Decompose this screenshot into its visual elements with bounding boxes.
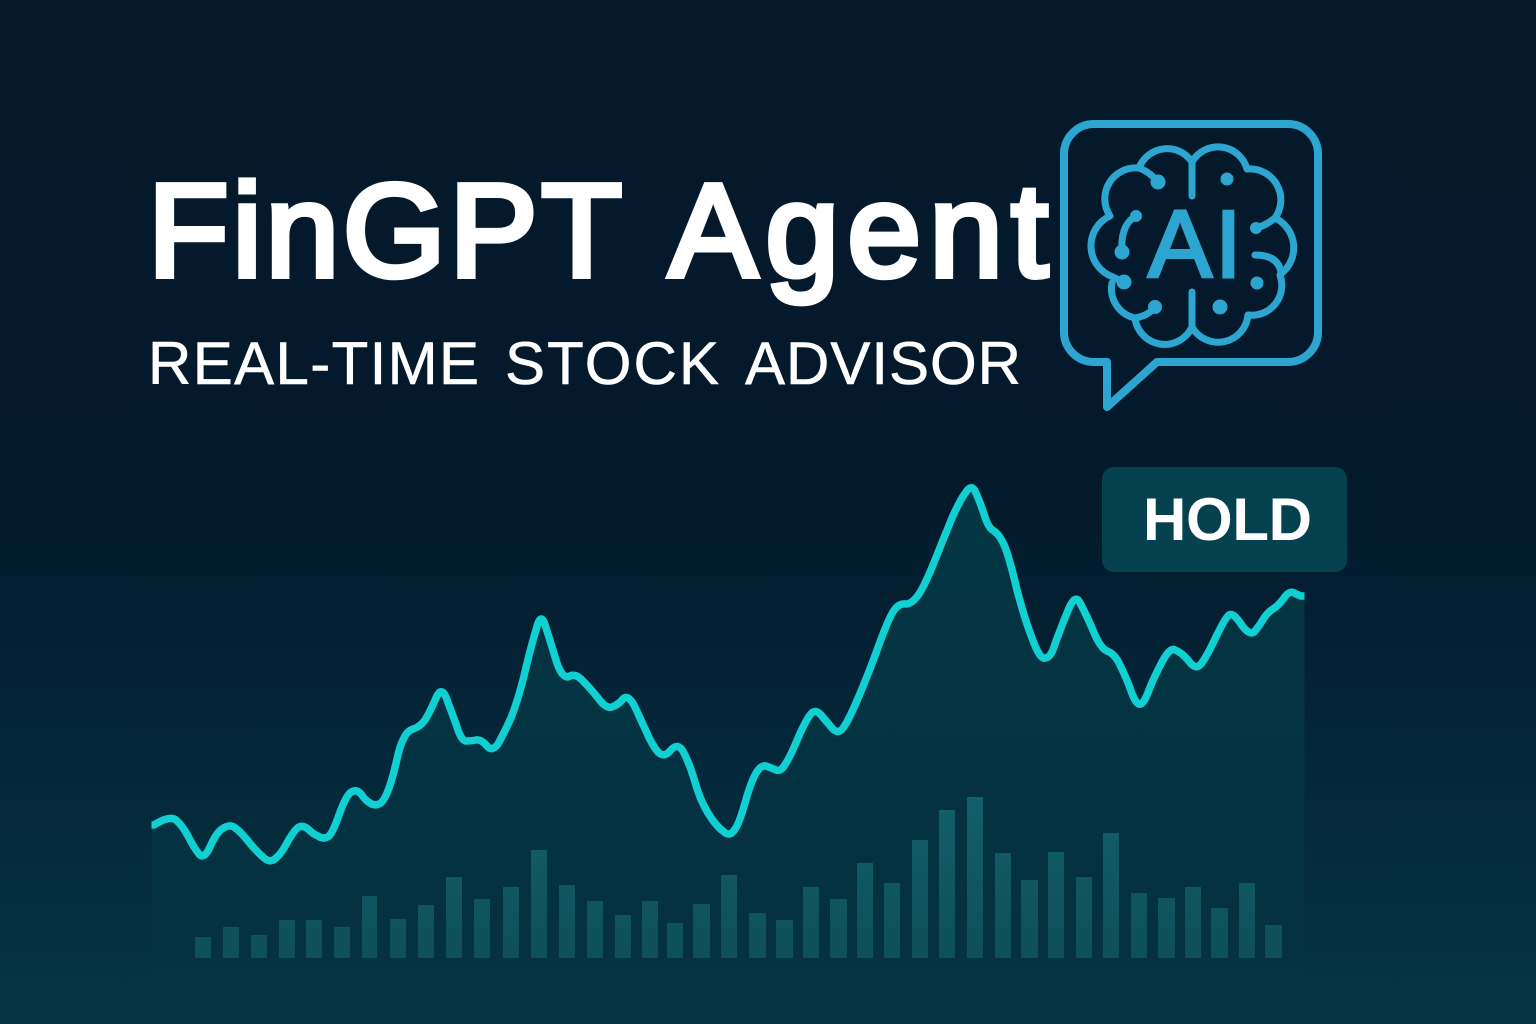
callout: HOLD badge [1102, 467, 1347, 572]
title: Agent [669, 157, 1048, 304]
chart: price area [344, 492, 1304, 816]
chart: price line [152, 484, 1304, 864]
icon: AI label [1148, 191, 1242, 298]
icon: AI label: A [1148, 191, 1212, 298]
callout: HOLD badge: HOLD [1143, 486, 1312, 553]
icon: AI label: I [1215, 191, 1242, 298]
icon: speech bubble outline [1064, 124, 1318, 407]
subtitle: REAL-TIME [148, 330, 479, 397]
subtitle: ADVISOR [745, 330, 1021, 397]
title: FinGPT [148, 157, 622, 304]
subtitle: STOCK [505, 330, 719, 397]
subtitle [148, 330, 1021, 397]
chart: volume bars [195, 797, 1282, 958]
icon: brain nodes [1114, 172, 1264, 314]
icon: brain outline [1091, 147, 1294, 344]
icon: AI brain speech bubble [1064, 124, 1318, 407]
title [148, 157, 1048, 304]
